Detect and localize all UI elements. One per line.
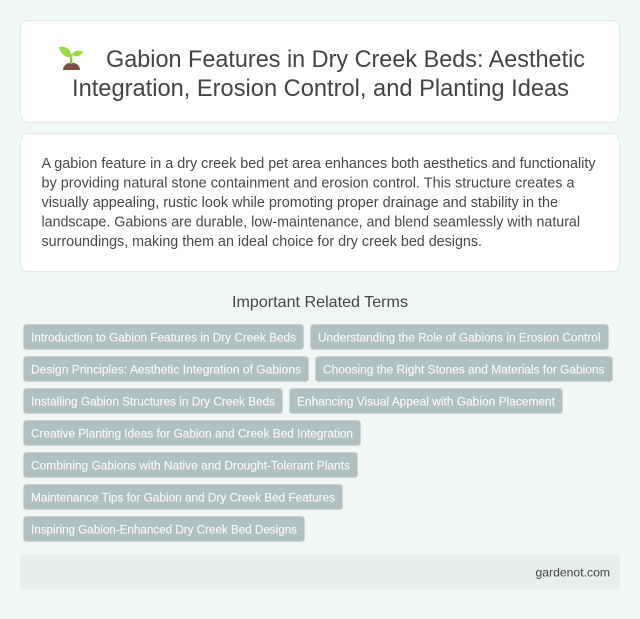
- text block: description: by providing natural stone containment and erosion control. This structure creates a: [42, 176, 574, 192]
- icon: sprout: [59, 47, 83, 70]
- tag: erosion control: [310, 324, 608, 350]
- text block: description: landscape. Gabions are durable, low-maintenance, and blend seamlessly with natural: [42, 214, 580, 230]
- tag: installing: Installing Gabion Structures in Dry Creek Beds: [31, 394, 275, 408]
- text block: description: visually appealing, rustic look while promoting proper drainage and stability in the: [42, 195, 558, 211]
- tag: design principles: [24, 356, 308, 382]
- tag: maintenance: [24, 484, 342, 510]
- title: [72, 46, 585, 102]
- tag: design principles: Design Principles: Aesthetic Integration of Gabions: [31, 362, 301, 376]
- footer text: gardenot.com: [536, 566, 610, 580]
- text block: description: surroundings, making them an ideal choice for dry creek bed designs.: [42, 234, 482, 250]
- tag: visual appeal: Enhancing Visual Appeal with Gabion Placement: [297, 394, 556, 408]
- heading: important related terms: Important Related Terms: [232, 294, 408, 311]
- tag: inspiring designs: [24, 516, 304, 542]
- title: Integration, Erosion Control, and Planting Ideas: [72, 75, 569, 102]
- footer: [20, 555, 620, 589]
- tag: creative planting: Creative Planting Ideas for Gabion and Creek Bed Integration: [31, 426, 353, 440]
- tag: erosion control: Understanding the Role of Gabions in Erosion Control: [318, 330, 600, 344]
- text block: description: A gabion feature in a dry creek bed pet area enhances both aesthetics and functionality: [42, 156, 596, 172]
- tag: creative planting: [24, 420, 360, 446]
- panel: title card: [20, 20, 620, 122]
- tag: installing: [24, 388, 282, 414]
- tag: choosing stones: [316, 356, 612, 382]
- tag: native plants: Combining Gabions with Native and Drought-Tolerant Plants: [31, 458, 350, 472]
- title: Gabion Features in Dry Creek Beds: Aesthetic: [106, 46, 585, 73]
- tag list: [24, 324, 612, 542]
- tag: visual appeal: [290, 388, 562, 414]
- tag: inspiring designs: Inspiring Gabion-Enhanced Dry Creek Bed Designs: [31, 522, 297, 536]
- tag: introduction: Introduction to Gabion Features in Dry Creek Beds: [31, 330, 296, 344]
- tag: native plants: [24, 452, 358, 478]
- tag: introduction: [24, 324, 304, 350]
- tag: choosing stones: Choosing the Right Stones and Materials for Gabions: [323, 362, 604, 376]
- tag: maintenance: Maintenance Tips for Gabion and Dry Creek Bed Features: [31, 490, 335, 504]
- text block: description: [42, 156, 596, 250]
- panel: description: [20, 134, 620, 272]
